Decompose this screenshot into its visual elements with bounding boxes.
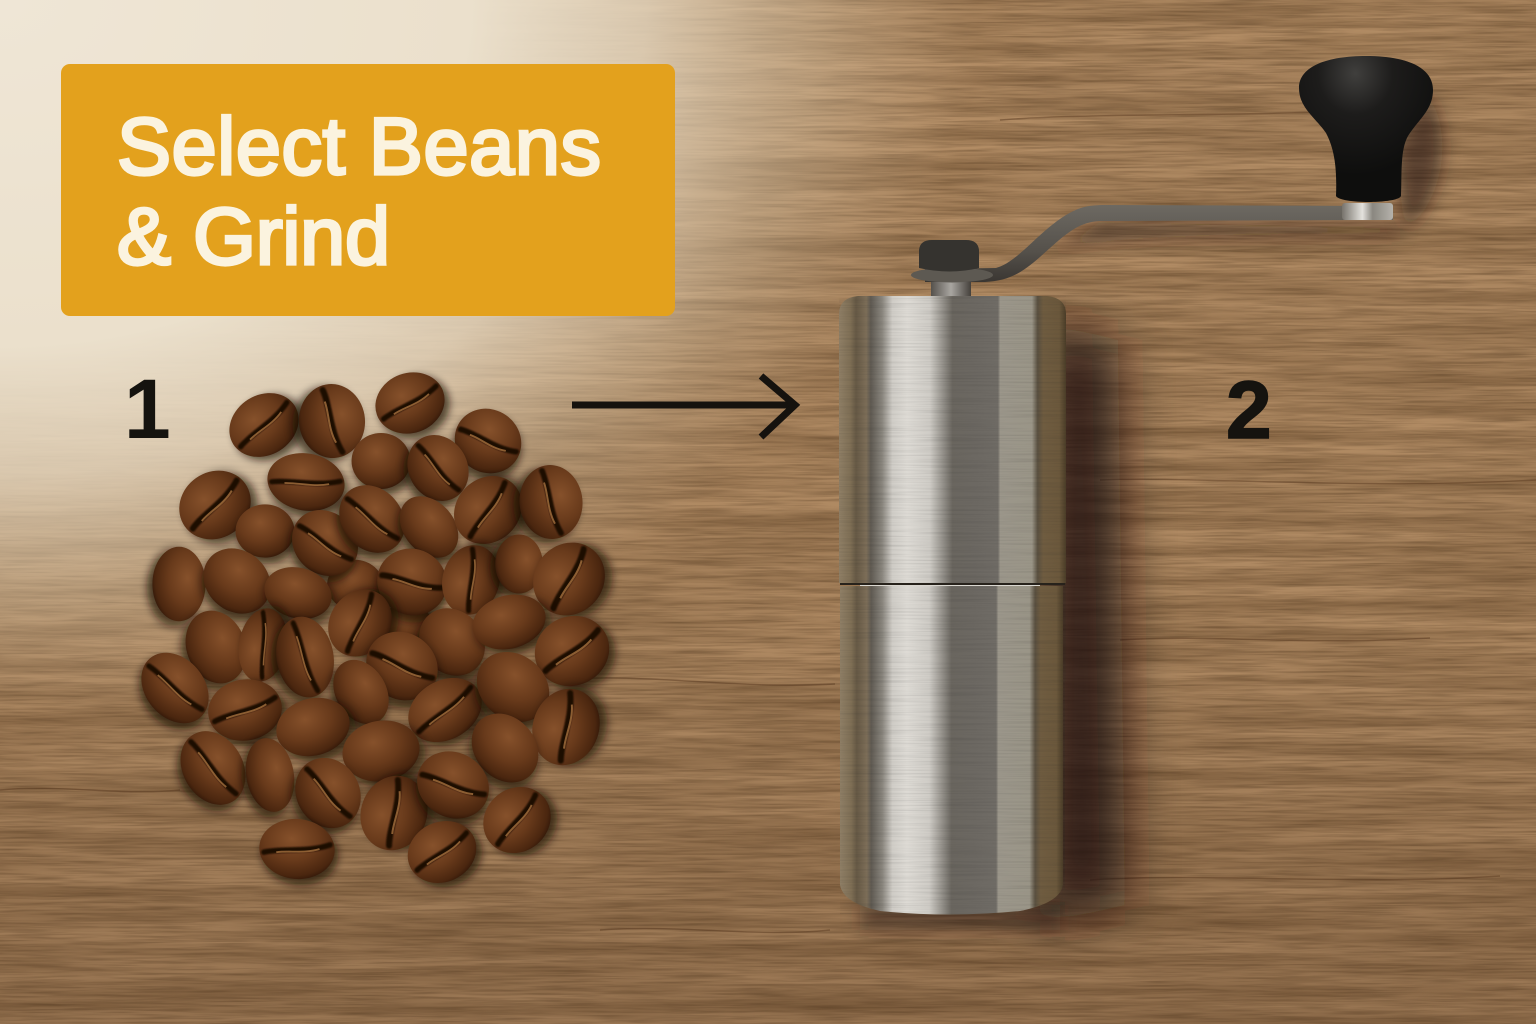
hand coffee grinder	[839, 56, 1433, 914]
knob ferrule	[1342, 203, 1393, 220]
black handle knob	[1299, 56, 1433, 202]
title banner: & Grind	[117, 192, 390, 282]
coffee beans pile	[123, 361, 628, 899]
grinder shadow	[860, 90, 1442, 930]
grinder lower body	[840, 586, 1063, 914]
grinder seam	[840, 583, 1065, 586]
crank collar	[911, 268, 993, 282]
grinder upper body	[839, 296, 1066, 583]
top cap	[919, 240, 979, 272]
crank arm	[925, 205, 1393, 282]
grinder drive post	[931, 278, 971, 298]
step number 2: 2	[1226, 365, 1272, 456]
step number 1: 1	[124, 362, 171, 456]
title banner: Select Beans	[117, 102, 601, 192]
title banner	[61, 64, 675, 316]
arrow from beans to grinder	[572, 376, 795, 437]
